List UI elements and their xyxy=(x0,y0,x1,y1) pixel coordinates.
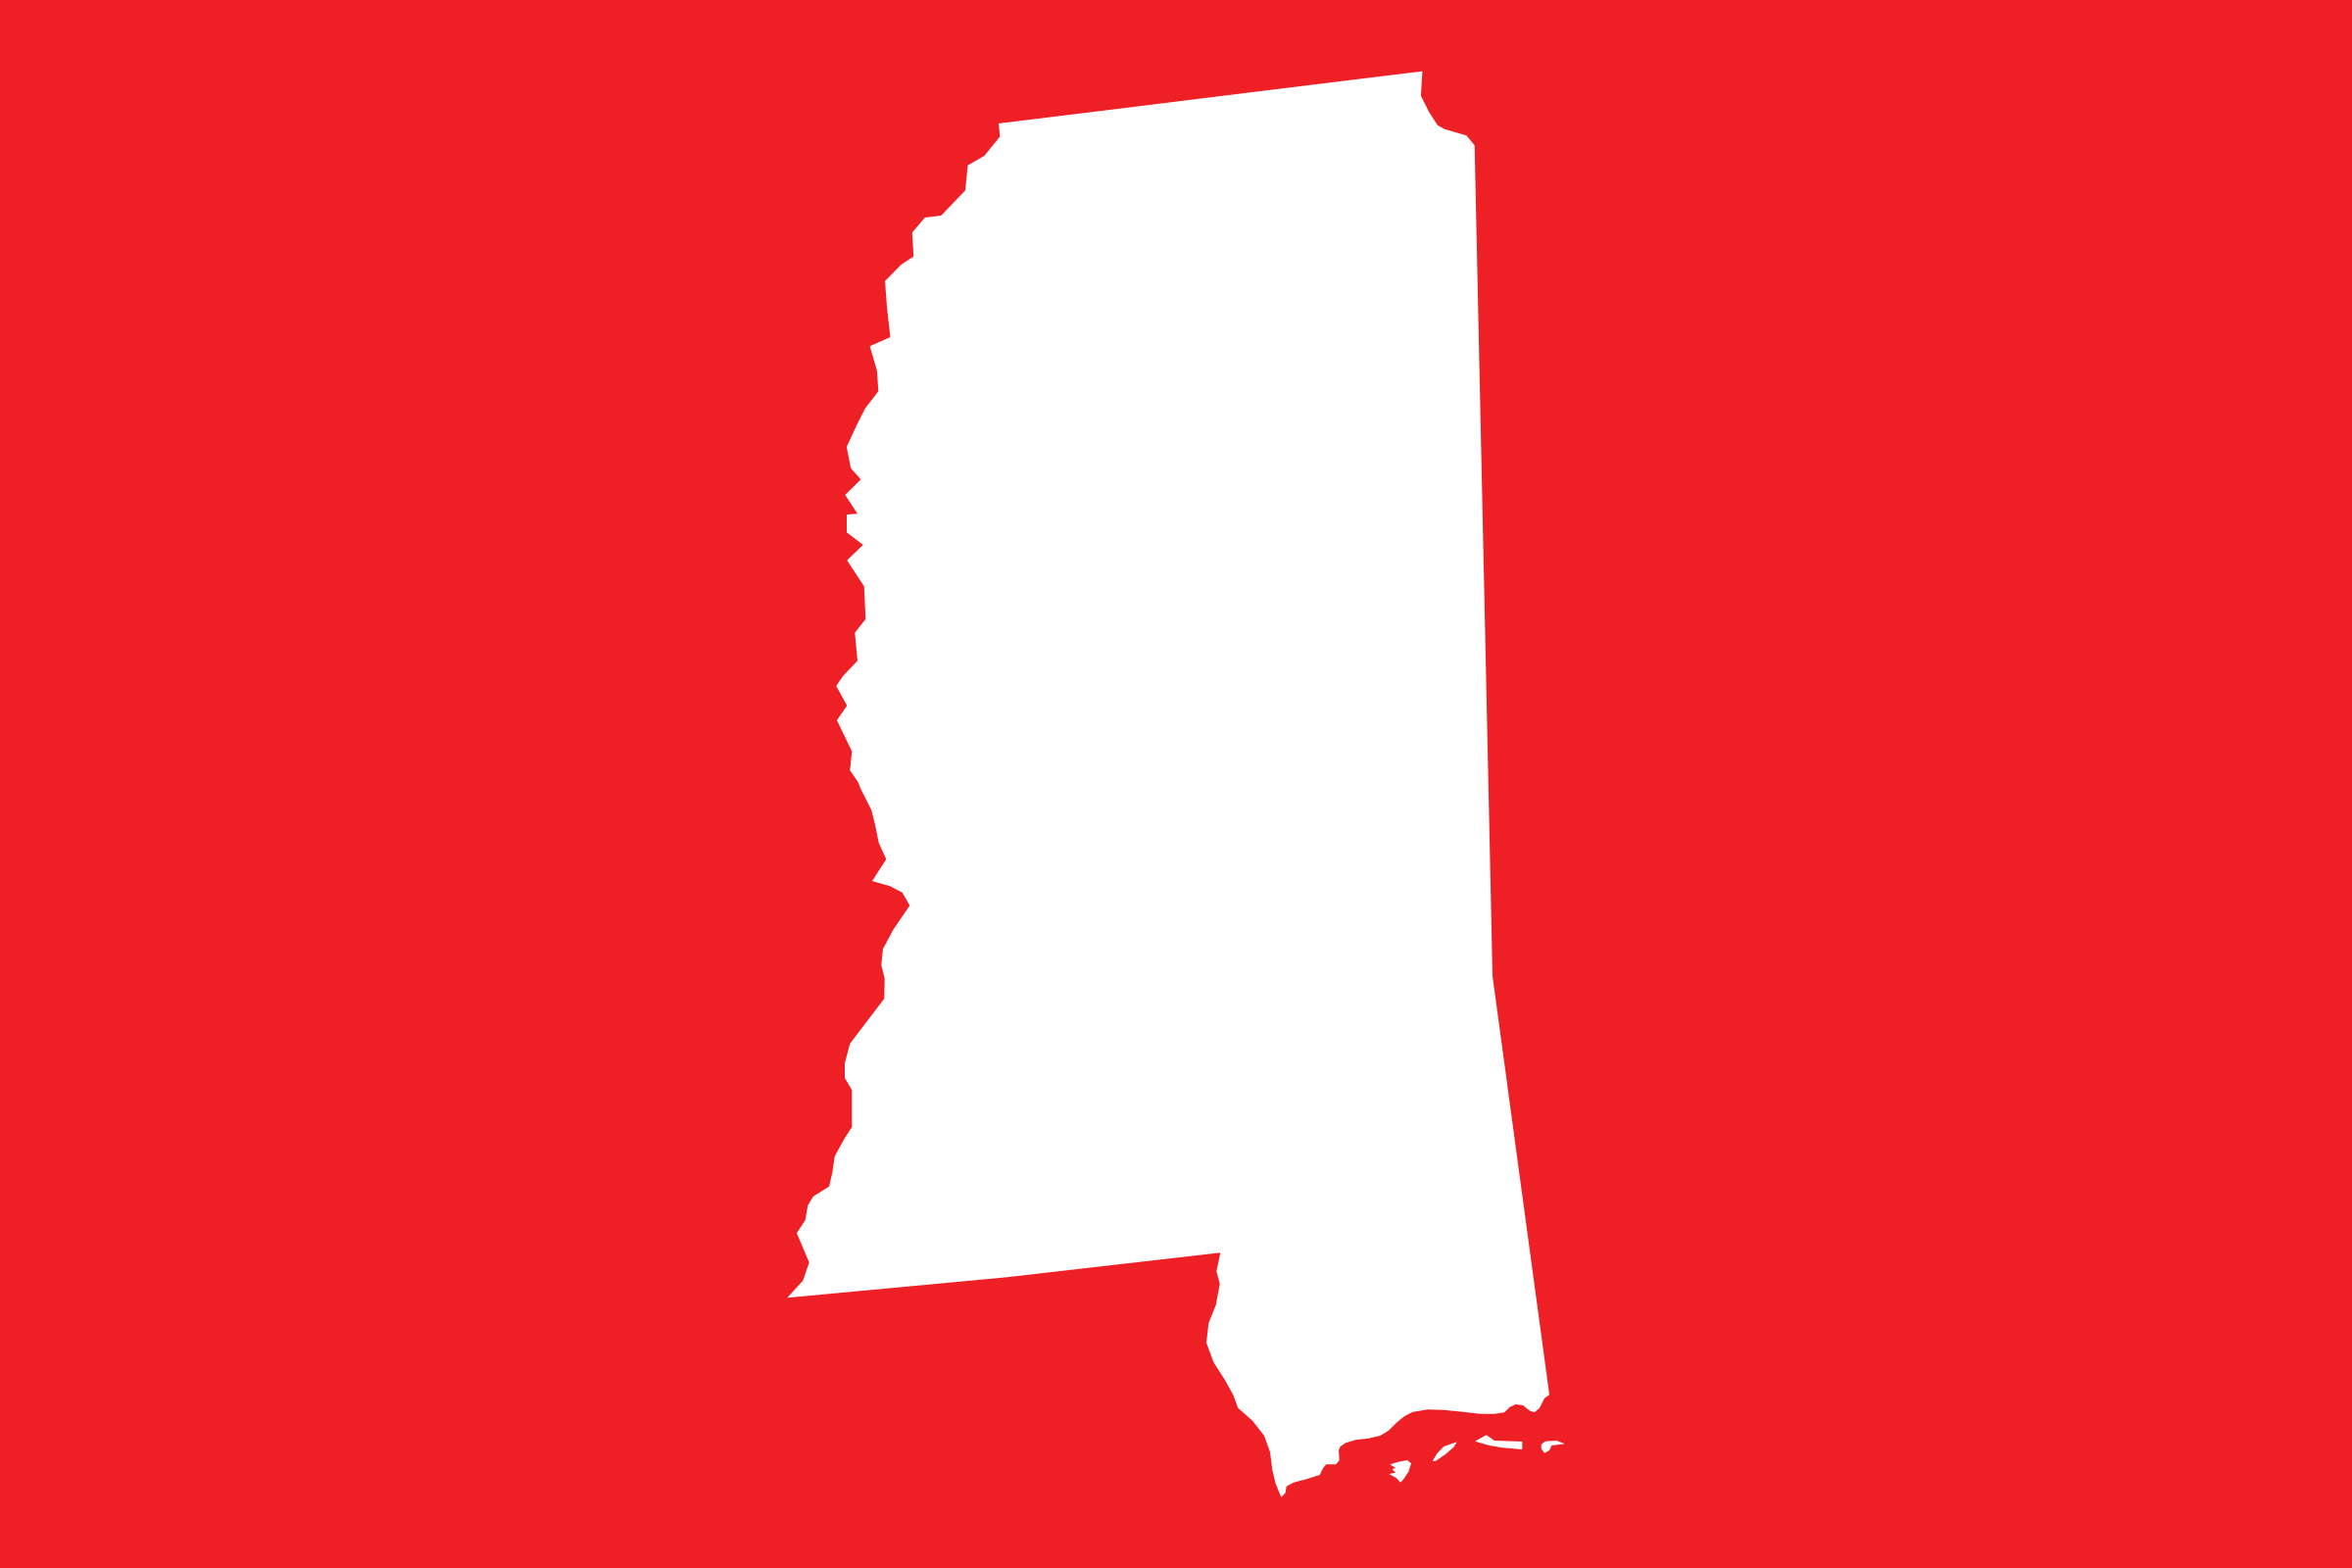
state silhouette: Mississippi mainland xyxy=(787,72,1549,1497)
islands: Gulf barrier islands xyxy=(1389,1435,1565,1483)
